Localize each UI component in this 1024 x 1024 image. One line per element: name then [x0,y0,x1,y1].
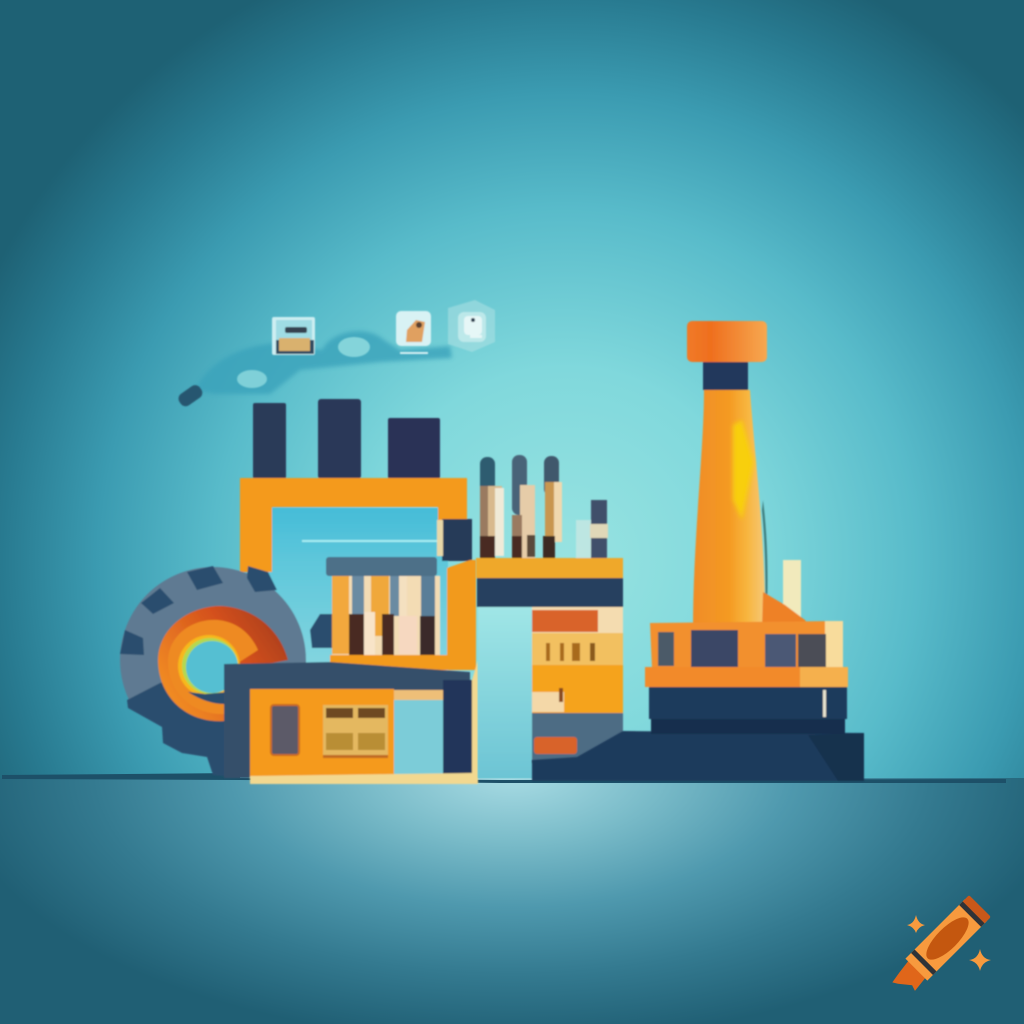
light gap [478,606,533,778]
platform base [532,731,864,781]
window glass [268,508,448,673]
window main [691,630,738,667]
cloud puff centre [338,337,370,357]
logo: crayon [887,895,991,999]
middle deck dark [477,578,623,607]
orange frame [240,478,467,572]
gear lower shadow [127,670,250,778]
doorway lintel [394,690,444,700]
gear teeth [120,630,144,655]
upper storey light end [825,621,843,669]
smokestack 3 [388,418,440,479]
house glass doorway [394,690,444,776]
hull highlight [823,690,826,717]
background: floor glow [0,778,1024,1024]
upper storey [650,621,842,668]
pill end of cable [176,383,205,409]
window highlight [302,540,437,542]
right tower building [532,321,864,781]
tower dark edge [762,500,768,610]
small cream chimney [783,560,801,625]
tube 1 [480,457,504,558]
middle deck orange [476,558,623,578]
orange right pier and floor [330,560,476,670]
window right pair [765,634,796,667]
gear wheel [120,566,333,778]
crayon body [887,895,991,999]
dark hull [649,687,847,719]
cream edge of box [437,520,443,556]
roof wedge [762,592,812,630]
house window [323,705,388,758]
smokestack 2 [318,399,361,479]
gear disc [120,567,306,702]
icon: badge hexagon [448,300,495,352]
dark box on frame [442,519,472,561]
factory left block [120,399,478,784]
background: teal radial sky [0,0,1024,780]
base shadow facet [808,733,864,781]
window far right [798,634,826,668]
smokestack 1 [253,403,286,479]
deck light end [800,667,848,687]
icon: person tile [396,311,431,354]
dark right column [443,680,472,774]
cloud icons strip [176,300,495,409]
sparkle left [907,915,925,933]
cream sill [250,660,478,784]
cloud puff left [237,370,267,388]
block floors [532,607,623,763]
colonnade columns [332,576,440,656]
hull lower [651,719,845,734]
tube 2 [512,455,535,560]
gap between hole and tail [188,692,228,704]
middle block [476,455,623,778]
window left [658,632,674,666]
orange deck [645,667,848,687]
tower cap [687,321,767,362]
tube 3 [543,456,562,558]
colonnade lintel [326,557,437,576]
house door [271,705,299,755]
gear hole [186,641,238,693]
icon: printer tile [272,317,315,355]
sparkle right [969,949,991,971]
ground line [2,773,1006,783]
tower shaft [693,390,765,630]
gear ring [158,606,288,721]
tower neck [703,362,748,390]
dark roof band [224,662,470,778]
tower yellow highlight [733,420,754,520]
tube 4 and glass [576,500,608,558]
orange lower house [250,689,394,777]
cloud swoosh [195,331,452,394]
